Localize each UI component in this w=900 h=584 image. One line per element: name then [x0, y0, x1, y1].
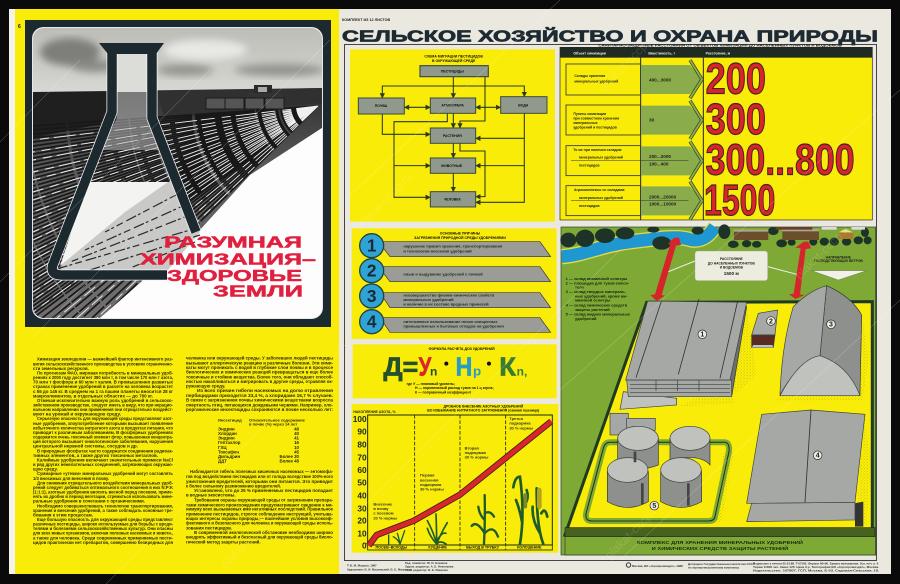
cause 2: 2 [367, 261, 376, 281]
watermark: site lines: plakat-cccp.ru [352, 169, 415, 232]
table: insecticide persistence: в почве (%) через 14 лет [249, 422, 297, 426]
heading: complex caption: КОМПЛЕКС ДЛЯ ХРАНЕНИЯ МИНЕРАЛЬНЫХ УДОБРЕНИЙ [637, 538, 803, 546]
cause 3: минеральных удобрений [403, 297, 454, 302]
text block: right column: к более сильному размножению вредителей. [186, 483, 281, 488]
credits at page bottom: Тираж 11600 экз. Заказ 125. Цена 3 р. Типография ВО «Агропромиздат», Москва. [753, 565, 879, 569]
stage notes: подкормка [465, 450, 487, 455]
text block: right column: рорганические инсектициды сохраняются в почве несколько лет: [186, 407, 334, 412]
arrow: prevailing wind [812, 255, 867, 280]
row 4 [566, 176, 775, 225]
dike around tanks [586, 442, 729, 521]
y axis values: 90 [357, 427, 367, 437]
stage notes: 20 % нормы [373, 515, 398, 520]
heading: chart title: ДРОБНОЕ ВНЕСЕНИЕ АЗОТНЫХ УДОБРЕНИЙ [444, 404, 524, 408]
row 2: при совместном хранении [573, 116, 619, 120]
text block: left column: телями и болезнями сельскохозяйственных культур. Они опасны [33, 526, 173, 531]
box: animals: ЖИВОТНЫЕ [440, 164, 463, 168]
tanks for liquid fertilizers [607, 426, 710, 510]
table: insecticide persistence: Инсектицид [218, 418, 242, 422]
stage notes: Третья [509, 416, 524, 421]
heading: formula: ФОРМУЛА РАСЧЕТА ДОЗ УДОБРЕНИЙ [429, 347, 495, 351]
table header: Объект химизации [573, 51, 606, 55]
text block: right column: нимуму всех вызываемых ими негативных последствий. Правильное [186, 507, 334, 512]
table: insecticide persistence: Более 30 [280, 454, 300, 459]
text block: right column: зования пестицидов. [186, 525, 232, 530]
stage notes: 30 % нормы [420, 487, 444, 492]
text block: right column: внедрять эффективный и безопасный для окружающей среды биоло- [186, 535, 334, 540]
panel: nitrogen fractional application chart [352, 404, 558, 553]
text block: left column: макроэлементов, в отдельных областях — до 700 кг. [33, 393, 153, 398]
y axis values: 30 [357, 503, 367, 513]
heading: causes [414, 232, 506, 240]
row 4: минеральных удобрений [579, 196, 623, 200]
cause 3: 3 [367, 286, 377, 306]
table: insecticide persistence: Хлордан [218, 431, 237, 436]
text block: left column: 1/3 вносимых для внесения в почву. [33, 476, 109, 481]
credits at page bottom: Техн. редактор: В. Е. Лаврова [405, 568, 448, 572]
callout: distance: ДО НАСЕЛЕННЫХ ПУНКТОВ [708, 261, 755, 265]
table: insecticide persistence: 10 [294, 445, 300, 450]
cause 1: нарушение правил хранения, транспортирования [403, 244, 503, 249]
text block: left column: с 55 до 145 кг. В среднем на 1 га пашни планеты вносится 28 кг [33, 389, 173, 394]
stage notes: подкормка [509, 421, 531, 426]
text block: left column: рений следует добиваться оптимального соотношения в них N:P:K [33, 485, 174, 490]
outer frame of right page [344, 44, 876, 560]
y axis values: 0 [362, 541, 367, 551]
text block: right column: Требования охраны окружающей среды от загрязнения препара- [194, 498, 334, 503]
text block: left column: цидов практически нет препаратов, совершенно безвредных для [33, 540, 173, 545]
cause 2 [360, 259, 551, 283]
text block: left column: ные удобрения, злоупотребление которыми вызывает появление [33, 421, 174, 426]
building 2 [752, 310, 778, 348]
credits at page bottom: Ред. плакатов: Ю. И. Новиков [405, 561, 448, 565]
plants [389, 477, 547, 544]
heading: scheme title: В ОКРУЖАЮЩЕЙ СРЕДЕ [432, 59, 476, 63]
formula: р [473, 363, 481, 378]
heading: complex caption: И ХИМИЧЕСКИХ СРЕДСТВ ЗАЩИТЫ РАСТЕНИЙ [652, 544, 789, 552]
panel: site plan of storage complex [560, 224, 876, 555]
y axis values: 60 [357, 465, 367, 475]
map legend: 4 — склад химических средств [566, 303, 628, 308]
text block: right column: применение пестицидов, строгое соблюдение инструкций, учитыва- [186, 511, 334, 516]
table: insecticide persistence: 16 [294, 440, 300, 445]
row 2: удобрений и пестицидов [573, 125, 617, 129]
watermark: site lines: plakat-cccp.ru [217, 509, 280, 572]
box: plants: РАСТЕНИЯ [443, 134, 462, 138]
text block: right column [186, 356, 334, 544]
y axis values: 100 [353, 414, 367, 424]
table: insecticide persistence [218, 418, 306, 464]
credits at page bottom: по агропромышленному комплексу [688, 566, 739, 570]
text block: left column: для всех живых организмов, включая полезных насекомых и животн., [33, 531, 173, 536]
y axis values: 20 [357, 516, 367, 526]
stage notes: подкормка [420, 482, 442, 487]
y axis values: 10 [357, 528, 367, 538]
cause 4: промышленных и бытовых отходов на удобрения [403, 324, 504, 329]
y axis values: 70 [357, 452, 367, 462]
flow arrows [382, 77, 524, 202]
row 4: пестицидов [579, 204, 600, 208]
flask interior [117, 53, 147, 92]
text block: left column: бования к этим процессам. [33, 512, 93, 517]
box: pesticides [420, 66, 488, 77]
row 2: минеральных [573, 121, 598, 125]
text block: left column: Для снижения отрицательного воздействия минеральных удоб- [37, 480, 174, 485]
stage notes: в почву [373, 506, 389, 511]
watermark: site lines: plakat-cccp.ru [792, 219, 855, 282]
map legend: 5 — склад жидких минеральных [566, 312, 631, 317]
building 1 [620, 299, 747, 409]
table: insecticide persistence: 48 [294, 426, 300, 432]
row 4: 1000...10000 [649, 202, 677, 207]
stage notes: Внесение [373, 501, 393, 506]
credits at page bottom: Допущено Государственным комитетом СССР [688, 562, 755, 566]
stage notes [373, 416, 534, 520]
text block: left column: зяйственном производстве, следует иметь в виду, что при нерацио- [33, 402, 174, 408]
box: plants [430, 128, 476, 143]
cause 1: и технологии внесения удобрений [403, 248, 472, 253]
text block: left column: вития сельскохозяйственного производства в условиях ограниченно- [33, 361, 173, 366]
credits at page bottom: Подписано к печати 05.01.88. Т-07165. Формат 60×90. Бумага мелованная. Усл. печ. л. 4. [753, 562, 879, 566]
text block: left column: Калийные удобрения включают значительные примеси NaCl [37, 458, 173, 462]
box: soil [358, 98, 404, 114]
row 2: 30 [649, 117, 655, 122]
cause 4: 4 [367, 312, 377, 332]
text block: right column: ностью накапливаться и мигрировать в другие среды, отравляя ок- [186, 379, 334, 384]
curve: nitrogen accumulation [369, 421, 551, 546]
text block: left column: сти земельных ресурсов. [33, 366, 89, 371]
text block: right column: биологических и химических реакций превращаться в еще более [186, 370, 334, 375]
row 3 [566, 135, 855, 184]
row 1: Склады хранения [574, 74, 605, 78]
text block: right column: ружающую среду. [186, 384, 225, 389]
row 4: Агрокомплексы со складами: [574, 188, 625, 192]
text block: right column: уничтожения вредителей, которыми они питаются. Это приводит [186, 479, 334, 484]
stage notes: Вторая [465, 445, 479, 450]
table header: Вместимость, т [648, 51, 675, 55]
y axis values: 50 [357, 478, 367, 488]
stage notes: весенняя [420, 477, 439, 482]
growth stages: ВЫХОД В ТРУБКУ [466, 546, 500, 550]
text block: left column: нять их дробно в период вегетации, стремиться использовать мине- [33, 494, 173, 499]
arrow: prevailing wind: НАПРАВЛЕНИЕ [826, 255, 852, 259]
text block: left column: Еще большую опасность для окружающей среды представляют [37, 517, 174, 522]
chart axes and grid [368, 415, 552, 550]
icon: chemical flask outline [52, 43, 196, 275]
axis label: НАКОПЛЕНИЕ АЗОТА, % [353, 410, 396, 414]
box: soil: ПОЧВА [375, 104, 388, 108]
text block: left column: и ряд других нежелательных соединений, загрязняющих окружаю- [33, 462, 174, 467]
building 4: 4 [816, 453, 820, 460]
text block: left column: хранения и внесения удобрений, а также соблюдать основные тре- [33, 508, 173, 513]
text block: right column: смертность птиц, питающихся дождевыми червями. Например, хло- [186, 402, 334, 407]
text block: right column: токсичные и стойкие вещества. Более того, они обладают способ- [186, 374, 334, 379]
text block: right column: каты могут проникать с водой в глубокие слои почвы и в процессе [186, 365, 334, 370]
box: human: ЧЕЛОВЕК [444, 197, 462, 201]
building 3: 3 [829, 322, 833, 329]
text block: right column: гический метод защиты растений. [186, 539, 261, 544]
panel: illustration with flask over field [25, 20, 331, 327]
text block: left column: избыточного количества нитратного азота в продуктах питания, что [33, 425, 173, 430]
small service buildings [610, 413, 655, 435]
row 1: 200 [706, 54, 766, 103]
growth stages: ПОСЕВ–ВСХОДЫ [376, 546, 408, 550]
panel: pesticide migration scheme [350, 49, 555, 222]
y axis values [353, 414, 367, 551]
text block: left column [33, 357, 174, 545]
table: insecticide persistence: Гептахлор [218, 440, 241, 445]
row 1: минеральных удобрений [574, 79, 618, 83]
text block: left column: странах применение удобрений в расчете на человека возрастет [33, 384, 174, 389]
text block: right column: тами химического происхождения предусматривают сведение к ми- [186, 502, 334, 507]
text block: left column: щую среду. [33, 467, 58, 472]
row 3: 100...400 [649, 161, 669, 166]
map legend: 2 — площадка для туков-смеси- [566, 280, 630, 285]
callout: distance: РАССТОЯНИЕ [720, 257, 744, 261]
text block: right column: пербицидами приходится 33,4 %, а хлоридами 16,7 % случаев. [186, 393, 333, 398]
text block: left column: В природных фосфатах часто содержатся соединения радиоак- [37, 448, 174, 453]
row 2: Пункты химизации [573, 112, 606, 116]
row 1: 400...3000 [649, 77, 671, 82]
building 3 [780, 286, 862, 396]
map legend: теля [575, 285, 585, 290]
callout: distance: 1500 м [724, 271, 739, 276]
text block: left column: 70 млн т фосфора и 60 млн т калия. В промышленно развитых [33, 380, 174, 385]
text block: right column: В современной экологической обстановке необходимо широко [194, 530, 333, 535]
text block: left column: Суммарные «утечки» минеральных удобрений могут составлять [37, 471, 173, 476]
growth stages: КУЩЕНИЕ [428, 546, 447, 550]
icon: tractor with seeders [206, 85, 284, 109]
stage notes: 30 % нормы [509, 425, 534, 430]
watermark: site lines: plakat-cccp.ru [597, 29, 660, 92]
stage notes: с посевом [373, 511, 394, 516]
watermark: site lines: plakat-cccp.ru [602, 499, 665, 562]
box: atmosphere [430, 98, 476, 113]
trees and village houses [560, 224, 872, 250]
row 3: 200...2000 [649, 154, 671, 159]
table: insecticide persistence: Более 48 [280, 458, 300, 464]
box: water [501, 97, 547, 113]
yellow ground plot [565, 302, 872, 535]
table: insecticide persistence: Эндрин [218, 426, 235, 432]
text block: left column: содержится очень токсичный элемент фтор, повышенная концентра- [33, 435, 173, 440]
heading: slogan: ХИМИЗАЦИЯ– [140, 252, 316, 268]
cause 1 [360, 234, 551, 258]
text block: left column: (1:1:1), азотные удобрения вносить весной перед посевом, приме- [33, 490, 174, 494]
cause 1: 1 [367, 236, 377, 256]
heading: causes: ЗАГРЯЗНЕНИЯ ПРИРОДНОЙ СРЕДЫ УДОБРЕНИЯМИ [414, 236, 506, 240]
cause 4: нитенсивное использование плохо очищенных [403, 319, 498, 324]
title: СЕЛЬСКОЕ ХОЗЯЙСТВО И ОХРАНА ПРИРОДЫ [342, 27, 878, 45]
box: pesticides: ПЕСТИЦИДЫ [441, 69, 464, 73]
river [562, 227, 715, 257]
credits at page bottom: Художники: В. И. Мазаевский, В. Б. Матросов [347, 568, 412, 572]
table: insecticide persistence: Дильдрин [218, 454, 240, 459]
row 4: 1500 [704, 176, 775, 225]
heading: slogan: ЗЕМЛИ [213, 284, 303, 300]
heading: slogan: ЗДОРОВЬЕ [167, 268, 302, 285]
building 4 [747, 410, 865, 527]
cause 3: и наличие в их составе вредных примесей [403, 302, 489, 307]
y axis values: 40 [357, 490, 367, 500]
arrow: prevailing wind: ГОСПОДСТВУЮЩИХ ВЕТРОВ [814, 259, 863, 263]
text block: left column: тивных элементов, а также других токсичных металлов. [33, 453, 158, 458]
formula legend: К — поправочный коэффициент [415, 391, 472, 395]
text block: left column: ральные удобрения в сочетании с органическими. [33, 499, 145, 504]
heading: table title: САНИТАРНО-ЗАЩИТНЫЕ РАССТОЯНИЯ ОТ ОБЪЕКТОВ ХИМИЗАЦИИ ДО НАСЕЛЕННЫХ ПУНКТОВ И ВОДОЕМОВ [598, 43, 842, 47]
building 1: 1 [700, 332, 704, 339]
credits at page bottom: Издательство: 107807, ГСП, Москва, Б-53, Садовая-Спасская, 18. [753, 568, 879, 572]
map legend: ных удобрений, кроме ам- [575, 293, 628, 298]
map legend: 3 — склад твердых минераль- [566, 289, 627, 294]
text block: right column: в водные экосистемы. [186, 493, 236, 498]
callout: distance: И ВОДОЕМОВ [720, 265, 743, 269]
text block: left column: Необходимо совершенствовать технологию транспортирования, [37, 503, 173, 508]
text block: right column: человека или окружающей среды. У заболевших людей пестициды [186, 356, 333, 361]
heading: causes: ОСНОВНЫЕ ПРИЧИНЫ [440, 232, 481, 236]
furrows in the field [33, 106, 318, 318]
formula legend: где У — плановый уровень; [407, 382, 455, 386]
text block: left column: вуют на урожай и окружающую среду. [33, 412, 121, 417]
panel: causes of pollution [352, 228, 557, 339]
map legend: защиты растений [575, 307, 610, 312]
table header [560, 47, 872, 58]
row 2: 300 [706, 95, 766, 144]
heading: complex caption [565, 537, 876, 555]
heading: chart title: ВО ИЗБЕЖАНИЕ НИТРАТНОГО ЗАГРЯЗНЕНИЯ (озимая пшеница) [427, 409, 539, 413]
row 2 [566, 95, 766, 144]
table header: Расстояние, м [706, 51, 731, 55]
table: insecticide persistence: Относительное содержание [249, 418, 306, 422]
row 3: 300...800 [706, 135, 855, 184]
text block: right column: Наблюдается гибель полезных кишечных насекомых — энтомофа- [190, 469, 334, 474]
heading: scheme title [424, 55, 483, 63]
text block: right column: В связи с загрязнением почвы химическими веществами возросла [186, 398, 334, 403]
text block: left column: Серьезную опасность для окружающей среды представляют азот- [37, 416, 173, 421]
text block: right column: ющих интересы охраны природы,— важнейшие условия высокоэф- [186, 516, 334, 521]
tanks for liquid fertilizers: 5 [652, 503, 656, 510]
hedge row [565, 528, 875, 537]
small note: set of sheets: КОМПЛЕКТ ИЗ 12 ЛИСТОВ [342, 18, 390, 22]
table: insecticide persistence: 41 [294, 436, 300, 440]
formula legend [407, 382, 494, 395]
text block: left column: центральной нервной системы, сосудов и др. [33, 444, 138, 449]
box: human [430, 192, 476, 207]
formula: Н [456, 351, 472, 381]
heading: slogan [140, 234, 316, 300]
cause 4 [360, 310, 551, 334]
heading: slogan: РАЗУМНАЯ [164, 234, 302, 252]
formula: У [419, 351, 432, 381]
table: insecticide persistence: ГХЦ [218, 445, 227, 450]
text block: left column: приводит к различным заболеваниям. В фосфорных удобрениях [33, 430, 174, 435]
box: animals [430, 158, 476, 173]
text block: left column: ция которого вызывает онкологические заболевания, нарушения [33, 439, 173, 444]
credits at page bottom [347, 561, 879, 572]
text block: right column: фективного и безопасного для человека и окружающей среды исполь- [186, 521, 333, 526]
text block: right column: вызывают аллергическую реакцию и различные болезни. Эти хими- [186, 361, 334, 366]
row 3: То же при наличии складов: [573, 148, 622, 152]
credits at page bottom: Худож. редактор: А. Б. Николаева [405, 564, 454, 568]
formula [383, 351, 527, 381]
row 3: пестицидов [579, 164, 600, 168]
text block: left column: различные пестициды, широко используемые для борьбы с вреди- [33, 522, 173, 527]
table: insecticide persistence: ДДТ [218, 458, 227, 464]
text block: left column: а также для человека. Среди современных применяемых пести- [33, 535, 174, 540]
panel: fertilizer dose formula [353, 344, 557, 398]
text block: left column: По прогнозам ФАО, мировая потребность в минеральных удоб- [37, 370, 174, 375]
formula: n [430, 364, 437, 378]
dotted shadows [678, 305, 871, 525]
box: water: ВОДА [518, 103, 529, 107]
formula: Д= [383, 351, 418, 381]
row 3: минеральных удобрений [579, 156, 623, 160]
building 2: 2 [769, 318, 773, 325]
panel: sanitary protection distances table [560, 43, 872, 225]
growth stages: КОЛОШЕНИЕ [517, 546, 542, 550]
map legend: миачной селитры [575, 298, 611, 303]
row 4: 2000...20000 [649, 194, 677, 199]
text block: left column: рениях к 2000 году достигнет 380 млн т, в том числе 170 млн т азота, [33, 375, 173, 380]
table: insecticide persistence: Токсафен [218, 450, 239, 454]
text block: right column: Из всех причин гибели насекомых на долю отравления [197, 388, 333, 393]
formula: К [499, 351, 516, 381]
growth stages [376, 546, 542, 550]
formula: n, [517, 364, 527, 378]
table: insecticide persistence: 45 [294, 450, 300, 454]
box: atmosphere: АТМОСФЕРА [441, 104, 464, 108]
table: insecticide persistence: 40 [294, 431, 300, 436]
heading: chart title [427, 404, 539, 413]
map legend: 1 — склад аммиачной селитры [566, 276, 628, 281]
table: insecticide persistence: Эндрин [218, 436, 235, 440]
formula legend: Н — нормативный расход туков на 1 ц зерна; [415, 386, 494, 390]
y axis values: 80 [357, 439, 367, 449]
cause 2: смыв и выдувание удобрений с почвой [403, 272, 483, 277]
text block: left column: Химизация земледелия — важнейший фактор интенсивного раз- [37, 357, 174, 362]
stage notes: Первая [420, 473, 435, 478]
page number: 6 [18, 24, 21, 30]
map legend: удобрений [575, 316, 597, 321]
credits at page bottom: © В. М. Мацола, 1987 [347, 564, 377, 568]
cause 3 [360, 284, 551, 308]
red distance arrows [650, 238, 811, 301]
row 1 [566, 54, 766, 103]
text block: right column: Установлено, что до 25 % применяемых пестицидов попадает [194, 488, 334, 493]
text block: left column: нальном направлении они применения они отрицательно воздейст- [33, 407, 173, 412]
stage notes: 30 % нормы [465, 455, 489, 460]
credits at page bottom: Москва, ВО «Агропромиздат», 1988 [632, 564, 683, 568]
icon: publisher mark [626, 563, 631, 567]
watermark: site lines: plakat-cccp.ru [67, 174, 130, 237]
heading: scheme title: СХЕМА МИГРАЦИИ ПЕСТИЦИДОВ [424, 55, 483, 59]
map legend [566, 276, 631, 321]
callout: distance [668, 251, 797, 281]
text block: right column: гов под воздействием пестицидов или от голода вследствие 100%-ного [186, 474, 333, 479]
cause 3: несовершенство физико-химических свойств [403, 292, 495, 297]
text block: left column: Отмечая исключительно важную роль удобрений в сельскохо- [37, 398, 174, 403]
